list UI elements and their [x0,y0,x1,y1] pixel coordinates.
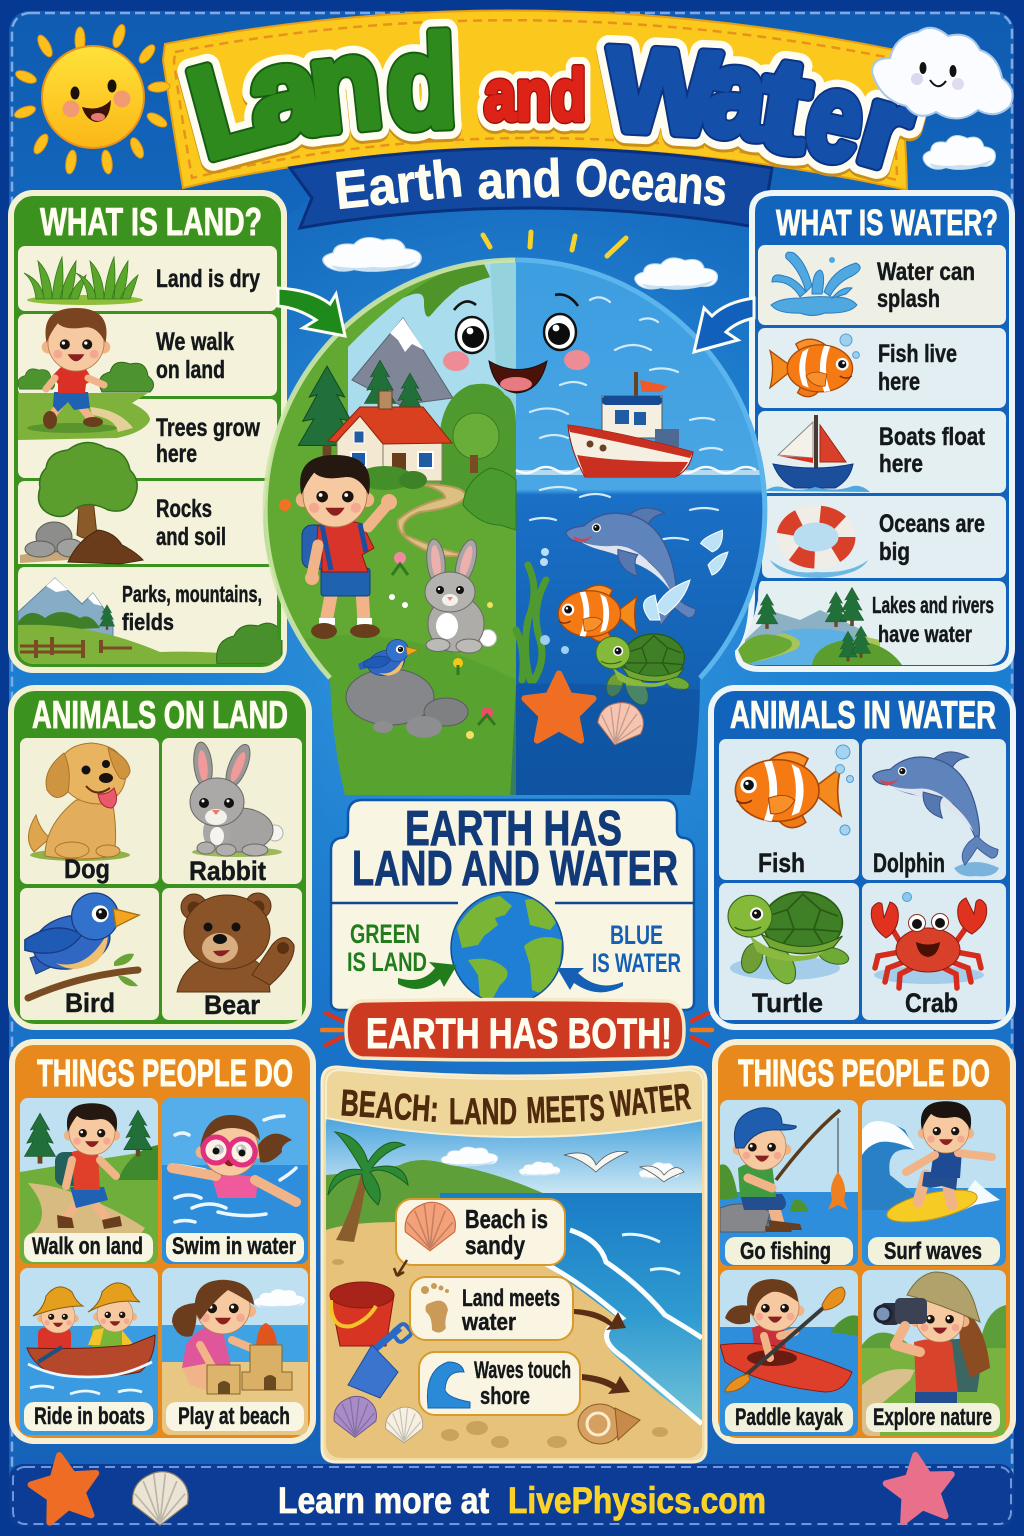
label pills right [725,1237,1000,1432]
shovel [348,1322,413,1398]
label pills right: Go fishing [740,1238,831,1265]
card: lakes and rivers have water: have water [878,621,972,647]
card: dolphin: Dolphin [873,848,945,878]
globe fish [558,585,637,641]
scene: explore nature [862,1270,1006,1436]
card: rocks and soil: Rocks [156,495,212,523]
card: crab: Crab [905,988,958,1018]
card: parks, mountains, fields: fields [122,609,174,635]
card: oceans are big: big [879,538,910,566]
callout: land meets water: water [461,1309,516,1336]
subtitle ribbon: Earth [332,149,466,221]
green is land label: IS LAND [347,947,427,977]
arrow: to earth from land [398,962,457,989]
card: parks, mountains, fields: Parks, mountains, [122,581,262,607]
card: we walk on land: We walk [156,328,234,356]
card: parks, mountains, fields [18,567,283,664]
globe shell [597,702,644,746]
panel: what is land [11,193,284,670]
heading: animals on land: ANIMALS ON LAND [32,694,288,737]
footer [9,1450,1014,1527]
subtitle ribbon: and [476,149,562,211]
globe outline [265,260,765,678]
label pills right: Paddle kayak [735,1404,843,1431]
card: bird: Bird [65,988,115,1018]
panel: animals on land [11,688,309,1027]
footer text: LivePhysics.com [508,1480,766,1521]
panel: earth has land and water [331,800,694,1010]
icon: earth [450,891,564,1005]
card: rocks and soil [18,481,270,564]
panel: what is water [738,193,1012,669]
card: rocks and soil: and soil [156,523,226,551]
heading: earth has land and water: EARTH HAS [405,802,622,856]
beach scene [326,1110,702,1463]
icon: sun [13,23,170,175]
title: Land and Water: a [698,20,775,166]
icon: orange starfish [27,1450,103,1525]
globe face [443,294,590,393]
panel: beach [322,1067,706,1463]
card: fish [719,739,859,880]
heading: earth has land and water [352,802,678,896]
card: oceans are big [762,496,1006,578]
arrow: waves touch shore [582,1374,630,1394]
card: trees grow here: Trees grow [156,414,260,442]
card: water can splash [758,245,1006,325]
heading: earth has land and water: LAND AND WATER [352,842,678,896]
sky clouds and rays [323,232,718,289]
panel: animals in water [711,688,1013,1027]
arrow: land meets water [574,1309,626,1330]
card: fish live here: here [878,368,920,396]
blue is water label: IS WATER [592,948,681,978]
callout: beach is sandy: Beach is [465,1204,548,1234]
beach heading banner: MEETS [526,1087,605,1131]
callout: waves touch shore [419,1352,580,1415]
green is land label [347,919,427,977]
heading: things people do: THINGS PEOPLE DO [37,1053,293,1095]
card: lakes and rivers have water [738,581,1006,668]
globe starfish [525,674,593,740]
subtitle ribbon [290,148,772,228]
scene: play at beach [162,1268,308,1435]
splash [644,530,728,620]
banner: earth has both [322,1000,712,1060]
rocks and globe bird [346,639,468,738]
blue is water label [592,920,681,978]
scene: ride in boats [20,1268,158,1435]
scene: swim in water [162,1098,308,1265]
scene: paddle kayak [720,1270,858,1436]
beach heading banner: WATER [609,1076,692,1125]
scene: surf waves [862,1100,1006,1266]
card: trees grow here [18,399,277,478]
title: Land and Water: and [484,56,586,136]
bucket [330,1282,394,1346]
callout: land meets water: Land meets [462,1285,560,1312]
card: boats float here [758,411,1006,493]
boat [568,372,693,477]
title: Land and Water: t [750,29,820,182]
card: bear [162,888,302,1020]
heading: what is land: WHAT IS LAND? [40,201,262,244]
title: Land and Water: d [384,8,459,156]
globe dolphin [566,508,695,625]
card: turtle [719,883,859,1020]
callout: waves touch shore: Waves touch [474,1357,571,1384]
title: Land and Water: e [794,42,877,190]
blue is water label: BLUE [610,920,663,950]
callout: land meets water [410,1277,573,1340]
globe turtle [596,634,691,709]
palm [328,1132,408,1242]
card: rabbit [162,738,302,886]
label pills [24,1233,304,1431]
card: oceans are big: Oceans are [879,510,985,538]
bubbles and seabed [510,548,700,800]
icon: walking boy scene [18,308,154,440]
icon: white shell [132,1472,188,1525]
card: water can splash: splash [877,285,940,313]
pine tree [298,366,356,459]
card: we walk on land: on land [156,356,225,384]
card: fish live here: Fish live [878,340,957,368]
beach shells [334,1396,640,1444]
card: trees grow here: here [156,440,197,468]
title: Land and Water: a [237,16,333,171]
scene: go fishing [720,1100,858,1266]
seaweed [516,565,546,680]
card: turtle: Turtle [752,988,823,1018]
label pills: Play at beach [178,1403,290,1430]
panel: things people do left [12,1042,313,1441]
banner: earth has both: EARTH HAS BOTH! [366,1010,672,1058]
label pills: Walk on land [32,1233,143,1260]
card: we walk on land [18,314,277,396]
water half [516,470,771,475]
globe boy [296,455,397,639]
card: land is dry: Land is dry [156,265,260,293]
label pills right: Surf waves [884,1238,982,1265]
arrow: water pointer [694,298,754,352]
title banner [163,8,926,198]
arrow: to earth from water [557,968,623,992]
title: Land and Water [175,8,926,198]
title: Land and Water: W [604,23,722,161]
title: Land and Water: r [846,59,926,195]
card: crab [862,883,1006,1020]
card: dog: Dog [64,854,110,884]
card: dog [20,738,159,884]
icon: tree rocks soil [20,442,143,564]
globe scene [255,255,771,800]
green is land label: GREEN [350,919,420,949]
footer text: Learn more at [278,1480,498,1521]
card: boats float here: here [879,450,923,478]
subtitle ribbon: Oceans [573,148,729,218]
card: boats float here: Boats float [879,423,986,451]
scene: walk on land [20,1098,158,1264]
icon: small cloud [923,136,995,169]
card: fish live here [758,328,1006,408]
card: rabbit: Rabbit [189,856,266,886]
callout: beach is sandy [394,1199,565,1276]
card: water can splash: Water can [877,258,975,286]
panel: things people do right [715,1042,1013,1441]
title: Land and Water: n [302,9,388,161]
house [328,391,452,481]
footprints [332,1259,668,1448]
label pills: Swim in water [172,1233,296,1260]
card: bird [20,888,159,1020]
beach heading banner [326,1070,703,1137]
trees behind house [440,384,516,500]
label pills: Ride in boats [34,1403,145,1430]
gulls [564,1151,684,1182]
callout: beach is sandy: sandy [465,1230,525,1260]
mountain [351,317,453,406]
globe rabbit [425,537,496,653]
grass and path [304,466,516,795]
beach heading banner: BEACH: [339,1082,440,1130]
sky in land half [348,260,516,428]
arrow: land pointer [278,288,345,336]
card: fish: Fish [758,848,805,878]
flowers [279,499,495,739]
callout: waves touch shore: shore [480,1383,530,1410]
card: dolphin [862,739,1006,880]
icon: pink starfish [883,1451,957,1524]
title: Land and Water: L [175,27,287,187]
icon: smiling cloud [872,28,1013,119]
card: land is dry [18,246,277,311]
card: bear: Bear [204,990,260,1020]
beach heading banner: LAND [449,1091,517,1132]
